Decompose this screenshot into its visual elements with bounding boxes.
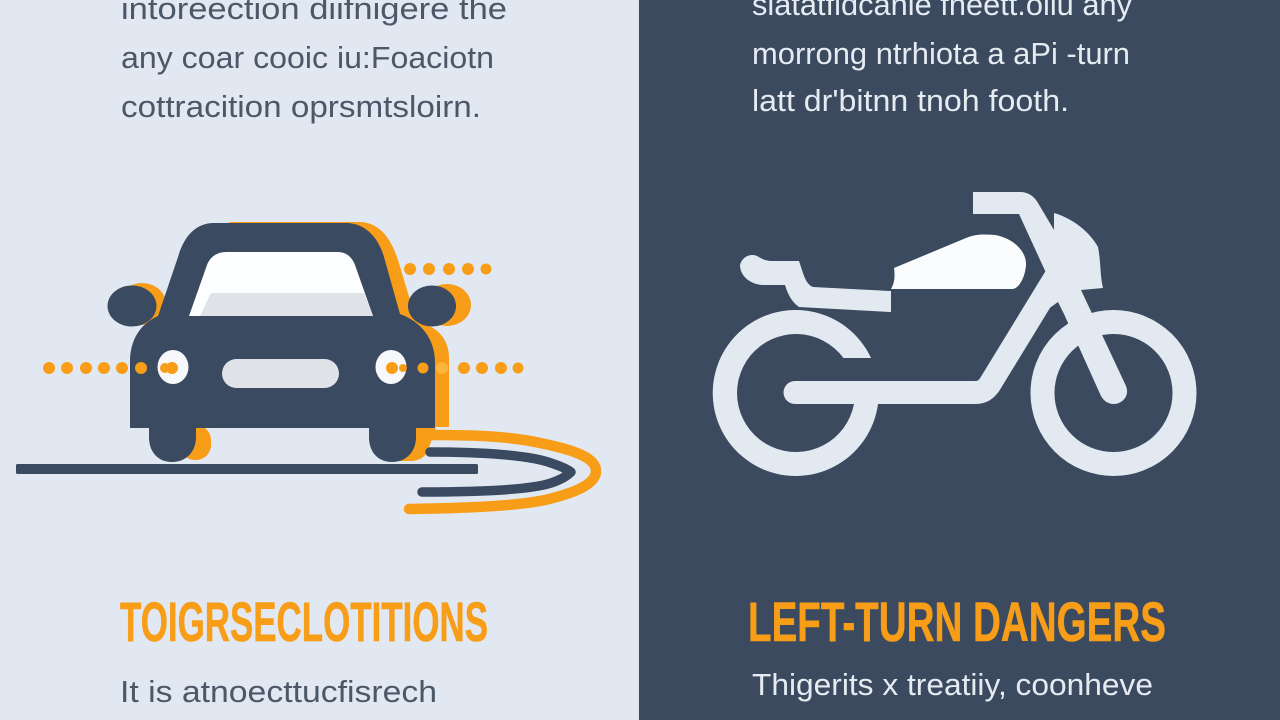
intro text block: right: morrong ntrhiota a aPi -turn	[752, 36, 1130, 71]
icon: motorcycle	[713, 192, 1184, 476]
fuel tank	[891, 234, 1026, 289]
heading: left: TOIGRSECLOTITIONS	[120, 590, 488, 653]
car orange offset shadow	[229, 222, 449, 427]
front wheel	[1042, 322, 1184, 464]
intro text block: right	[752, 0, 1132, 118]
windshield	[189, 252, 373, 316]
panel: left-turn dangers	[639, 0, 1280, 720]
intro text block: left: cottracition oprsmtsloirn.	[121, 89, 481, 124]
dotted light beam lower	[43, 362, 524, 374]
rear wheel	[713, 310, 878, 476]
intro text block: right: latt dr'bitnn tnoh footh.	[752, 83, 1069, 118]
frame	[795, 276, 1056, 392]
fork and handlebar	[973, 192, 1127, 404]
seat	[740, 255, 891, 312]
dotted light beam upper	[404, 263, 492, 275]
body text: right: Thigerits x treatiiy, coonheve	[752, 667, 1153, 702]
intro text block: left: any coar cooic iu:Foaciotn	[121, 40, 494, 75]
intro text block: left	[121, 0, 507, 124]
grille	[222, 359, 339, 388]
body text: left: It is atnoecttucfisrech	[120, 674, 437, 709]
road	[16, 464, 478, 474]
icon: car at intersection	[16, 222, 596, 509]
curved turn path: dark	[422, 452, 571, 492]
headlights	[158, 350, 188, 384]
curved turn path: orange	[409, 435, 596, 509]
mirrors	[108, 286, 156, 326]
car body	[130, 223, 435, 462]
panel: intersections	[0, 0, 639, 720]
